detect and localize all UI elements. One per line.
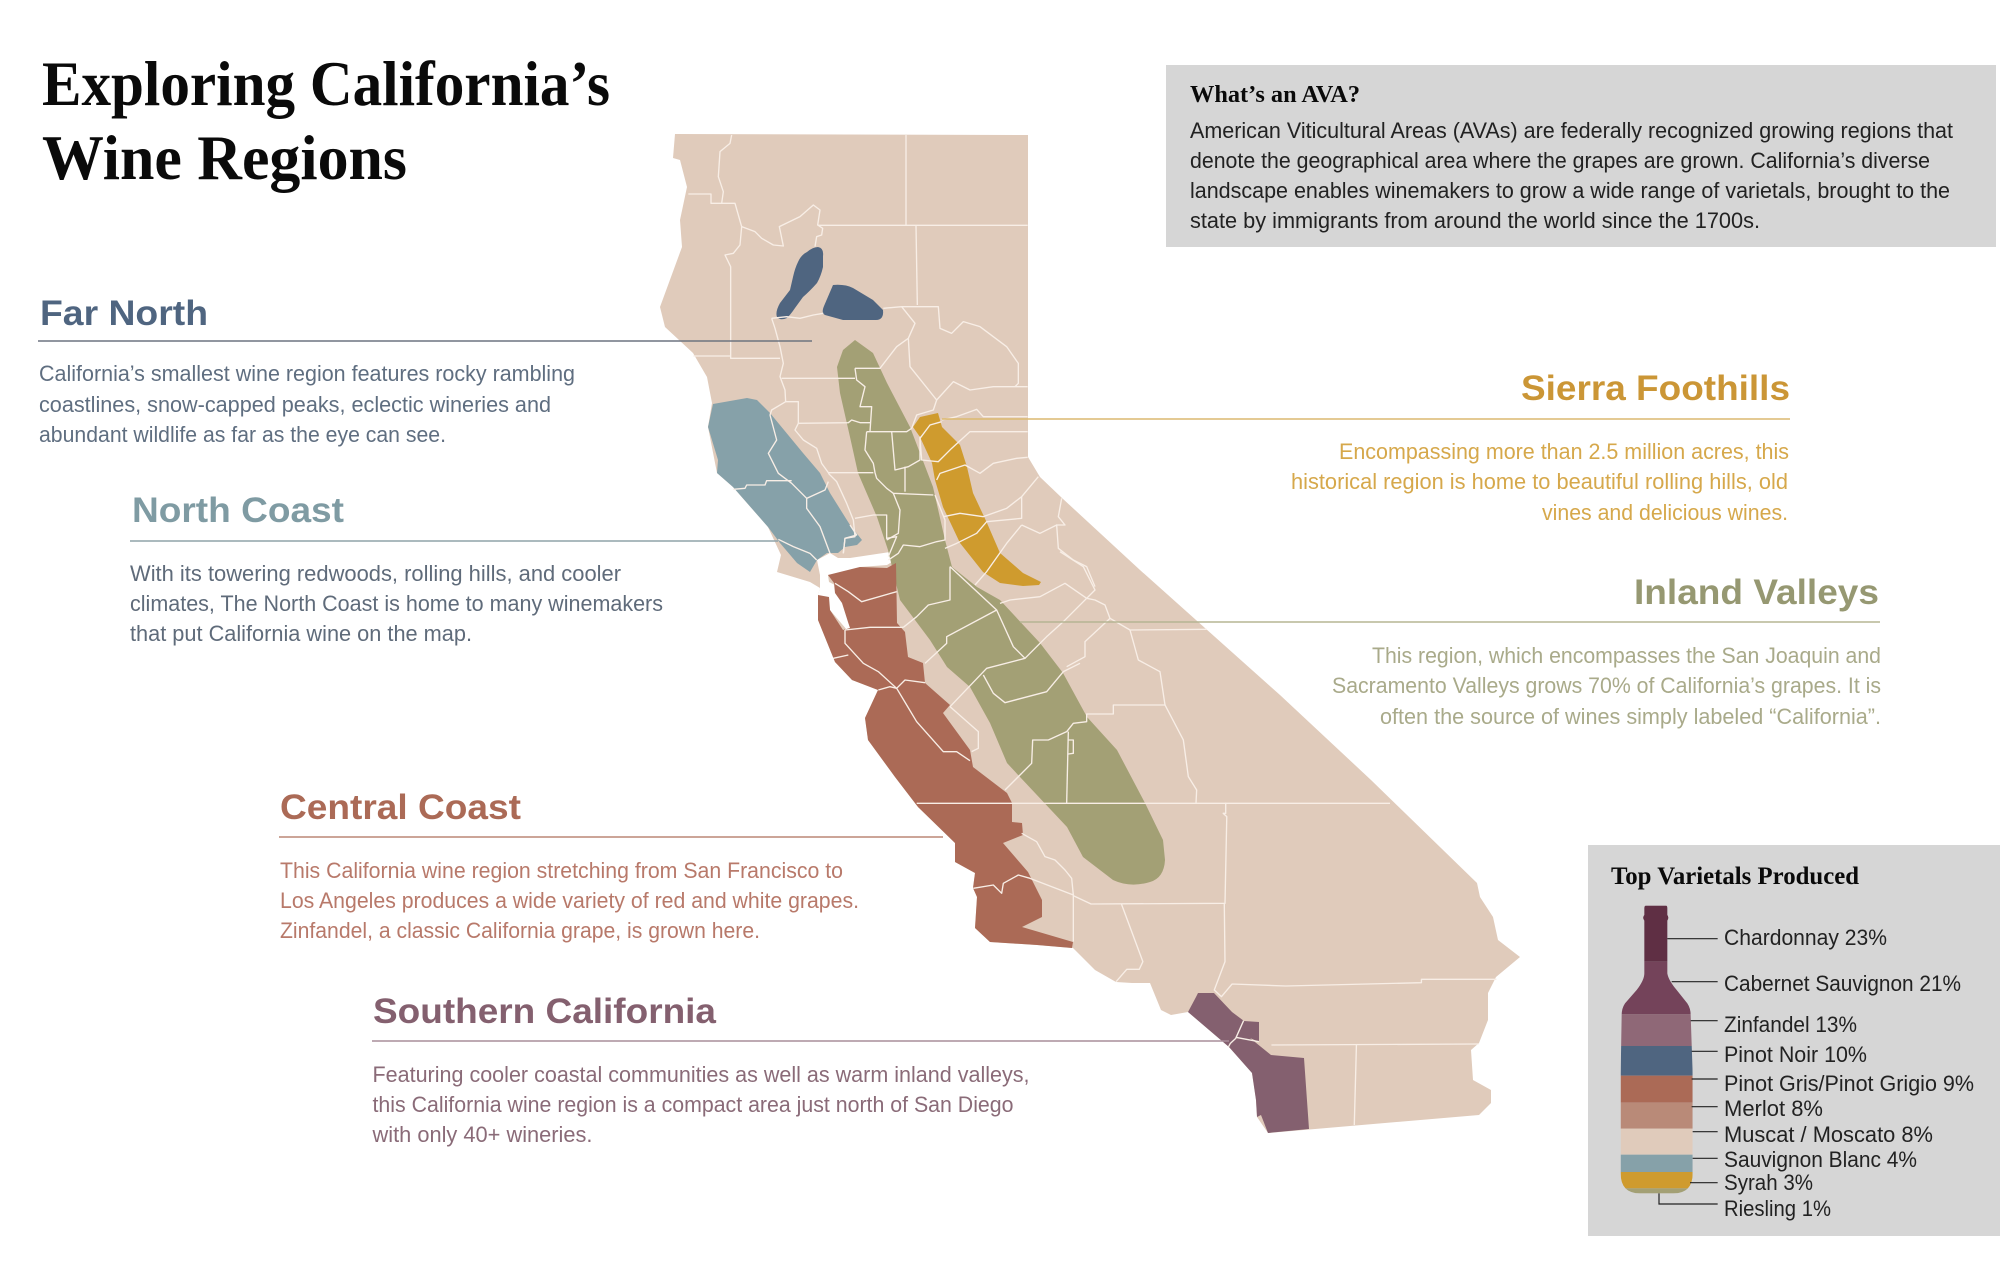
AVA body text: denote the geographical area where the grapes are grown. California’s diverse bbox=[1190, 148, 1930, 173]
AVA body text: landscape enables winemakers to grow a wide range of varietals, brought to the bbox=[1190, 178, 1950, 203]
varietal labels: Cabernet Sauvignon 21% bbox=[1724, 971, 1961, 996]
AVA heading: What’s an AVA? bbox=[1190, 82, 1360, 108]
AVA body text bbox=[1190, 118, 1953, 233]
panel: Central Coast bbox=[279, 788, 943, 943]
varietal labels: Chardonnay 23% bbox=[1724, 925, 1887, 950]
varietal labels: Riesling 1% bbox=[1724, 1196, 1831, 1221]
varietal labels: Syrah 3% bbox=[1724, 1170, 1813, 1195]
varietal labels: Zinfandel 13% bbox=[1724, 1012, 1857, 1037]
varietal labels: Merlot 8% bbox=[1724, 1096, 1823, 1121]
Southern California body bbox=[372, 1062, 1030, 1147]
AVA body text: American Viticultural Areas (AVAs) are federally recognized growing regions that bbox=[1190, 118, 1953, 143]
county lines bbox=[688, 135, 1496, 1125]
Central Coast body: Zinfandel, a classic California grape, is grown here. bbox=[280, 918, 760, 943]
panel: Top Varietals Produced bbox=[1588, 845, 2000, 1236]
region: Central Coast bbox=[818, 563, 1073, 948]
Inland Valleys body: Sacramento Valleys grows 70% of California’s grapes. It is bbox=[1332, 673, 1881, 698]
varietal labels: Pinot Noir 10% bbox=[1724, 1042, 1867, 1067]
panel: Southern California: Southern California bbox=[373, 992, 717, 1031]
panel: Far North bbox=[38, 294, 812, 447]
North Coast body: that put California wine on the map. bbox=[130, 621, 472, 646]
title: Exploring California’s bbox=[42, 49, 610, 119]
varietals heading: Top Varietals Produced bbox=[1611, 863, 1859, 890]
title: Wine Regions bbox=[42, 123, 407, 193]
panel: Central Coast: Central Coast bbox=[280, 788, 521, 827]
bottle leader lines bbox=[1659, 939, 1718, 1204]
varietal labels: Sauvignon Blanc 4% bbox=[1724, 1147, 1917, 1172]
Southern California body: Featuring cooler coastal communities as well as warm inland valleys, bbox=[372, 1062, 1030, 1087]
panel: Sierra Foothills: Sierra Foothills bbox=[1521, 369, 1790, 408]
Inland Valleys body: This region, which encompasses the San Joaquin and bbox=[1372, 643, 1881, 668]
bottle chart bbox=[1613, 903, 1718, 1204]
Central Coast body: Los Angeles produces a wide variety of red and white grapes. bbox=[280, 888, 859, 913]
region: Sierra Foothills bbox=[913, 413, 1041, 586]
panel: Sierra Foothills bbox=[942, 369, 1790, 525]
panel: Southern California bbox=[372, 992, 1229, 1147]
Sierra Foothills body bbox=[1291, 439, 1789, 525]
San Francisco Bay bbox=[817, 552, 895, 630]
Southern California body: with only 40+ wineries. bbox=[372, 1122, 592, 1147]
region: Far North bbox=[776, 247, 883, 320]
Central Coast body: This California wine region stretching from San Francisco to bbox=[280, 858, 843, 883]
map base: California state outline bbox=[660, 134, 1520, 1133]
Far North body: California’s smallest wine region features rocky rambling bbox=[39, 361, 575, 386]
region: North Coast bbox=[708, 398, 862, 572]
Far North body bbox=[39, 361, 575, 447]
Far North body: coastlines, snow-capped peaks, eclectic wineries and bbox=[39, 392, 551, 417]
region: Southern California bbox=[1188, 993, 1309, 1133]
panel: North Coast: North Coast bbox=[132, 491, 344, 530]
varietal labels: Pinot Gris/Pinot Grigio 9% bbox=[1724, 1071, 1974, 1096]
panel: Inland Valleys: Inland Valleys bbox=[1634, 573, 1879, 612]
Sierra Foothills body: vines and delicious wines. bbox=[1542, 500, 1788, 525]
Central Coast body bbox=[280, 858, 859, 943]
panel: North Coast bbox=[130, 491, 778, 646]
Sierra Foothills body: historical region is home to beautiful rolling hills, old bbox=[1291, 469, 1788, 494]
AVA body text: state by immigrants from around the world since the 1700s. bbox=[1190, 208, 1760, 233]
Sierra Foothills body: Encompassing more than 2.5 million acres, this bbox=[1339, 439, 1789, 464]
panel: Inland Valleys bbox=[1020, 573, 1881, 729]
map: California wine regions bbox=[660, 134, 1520, 1133]
region: Inland Valleys bbox=[837, 340, 1165, 885]
Far North body: abundant wildlife as far as the eye can see. bbox=[39, 422, 446, 447]
North Coast body: With its towering redwoods, rolling hills, and cooler bbox=[130, 561, 621, 586]
North Coast body bbox=[130, 561, 663, 646]
Inland Valleys body: often the source of wines simply labeled “California”. bbox=[1380, 704, 1881, 729]
Southern California body: this California wine region is a compact area just north of San Diego bbox=[372, 1092, 1014, 1117]
varietal labels bbox=[1724, 925, 1974, 1221]
varietal labels: Muscat / Moscato 8% bbox=[1724, 1122, 1933, 1147]
title bbox=[42, 49, 610, 193]
panel: What's an AVA? bbox=[1166, 65, 1996, 247]
panel: Far North: Far North bbox=[40, 294, 208, 333]
Inland Valleys body bbox=[1332, 643, 1881, 729]
North Coast body: climates, The North Coast is home to many winemakers bbox=[130, 591, 663, 616]
